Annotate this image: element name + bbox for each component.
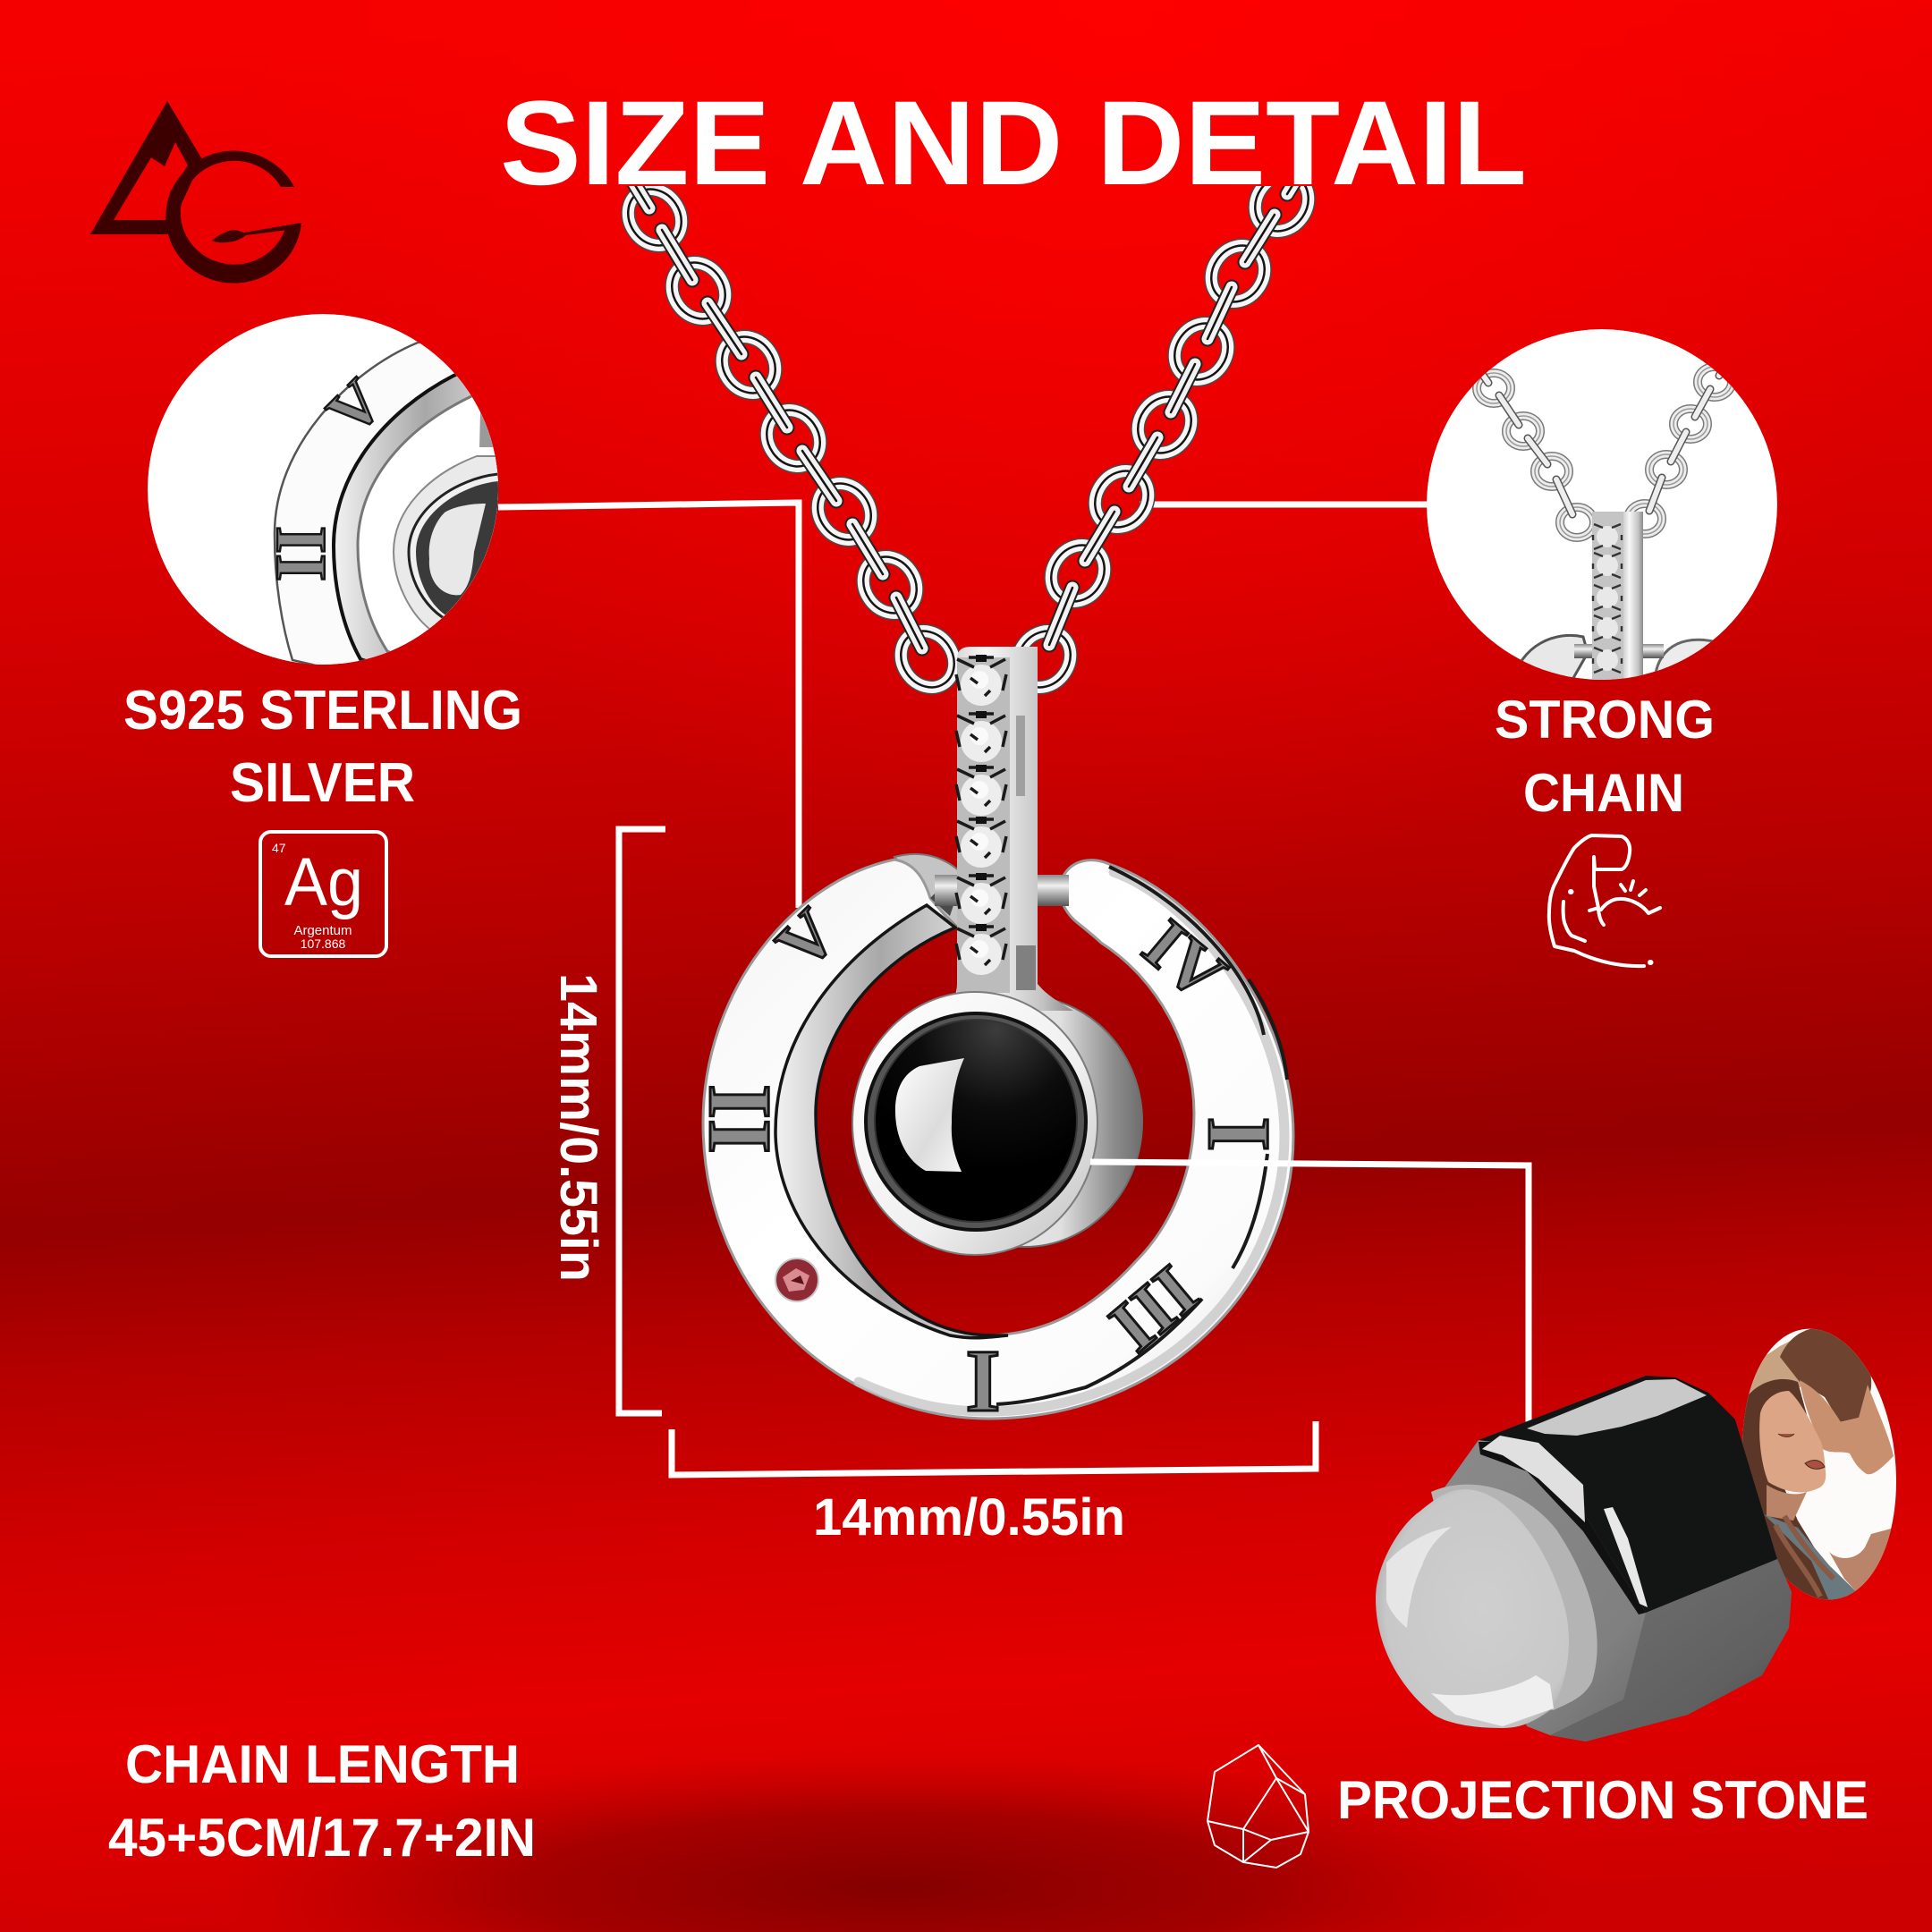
title: SIZE AND DETAIL [500, 77, 1527, 210]
woman face [1759, 1391, 1826, 1492]
icon: silver periodic element: 107.868 [301, 936, 346, 951]
woman hair [1740, 1379, 1847, 1601]
stone highlight [895, 1058, 964, 1172]
stone highlights [1527, 1379, 1707, 1436]
pendant ring band [703, 860, 1293, 1419]
icon: silver periodic element: Argentum [293, 923, 352, 938]
stone lower body [1550, 1559, 1792, 1741]
label: strong chain [1495, 690, 1715, 823]
roman numeral IV: IV [1129, 905, 1240, 1016]
pendant [691, 647, 1293, 1430]
woman neck [1767, 1485, 1807, 1521]
stone black body [1479, 1376, 1777, 1613]
light collar [1431, 1485, 1597, 1710]
dimension bracket horizontal [672, 1421, 1316, 1475]
black projection stone [875, 1020, 1077, 1222]
label: strong chain: STRONG [1495, 690, 1715, 750]
roman numeral II: II [691, 1084, 790, 1154]
pendant inner rim [775, 905, 1008, 1338]
dimension bracket vertical [619, 829, 665, 1413]
ring tip shadow [930, 884, 957, 916]
dimension label vertical: 14mm/0.55in [549, 973, 607, 1282]
label: chain length: 45+5CM/17.7+2IN [108, 1808, 536, 1868]
couple photo projection [1742, 1329, 1896, 1599]
hat [1746, 1341, 1801, 1403]
ring back section [894, 854, 961, 930]
icon: silver periodic element: Ag [284, 844, 363, 920]
logo: mountain and G mark [90, 101, 301, 284]
connector line: sterling silver callout [498, 503, 799, 908]
roman numeral V: V [761, 894, 852, 984]
stone glass lens [1376, 1489, 1569, 1728]
label: chain length [108, 1734, 536, 1868]
projection stone bezel [852, 992, 1097, 1255]
red gem [775, 1258, 818, 1301]
roman numeral III: III [1095, 1250, 1213, 1367]
hair strands [1775, 1516, 1834, 1597]
label: sterling silver: S925 STERLING [123, 680, 522, 741]
icon: silver periodic element: 47 [272, 841, 286, 855]
label: sterling silver: SILVER [230, 752, 415, 814]
roman numeral I right: I [1190, 1117, 1289, 1151]
icon: gem outline [1208, 1745, 1309, 1868]
connector line: projection stone callout [1090, 1162, 1529, 1431]
woman lips and eye [1778, 1434, 1825, 1469]
stone black band [1479, 1442, 1646, 1614]
detail circle: sterling silver: V [313, 365, 397, 449]
label: strong chain: CHAIN [1523, 763, 1684, 823]
label: chain length: CHAIN LENGTH [125, 1734, 520, 1794]
connector line: strong chain callout [1140, 501, 1429, 508]
arm [1829, 1529, 1891, 1590]
necklace chain [617, 157, 1319, 698]
lens reflection bottom [1431, 1675, 1554, 1726]
detail circle: sterling silver: II [261, 526, 340, 581]
ring edge lines [996, 867, 1287, 1404]
label: sterling silver [123, 680, 522, 814]
icon: flexed muscle [1549, 835, 1660, 966]
dimension label horizontal: 14mm/0.55in [813, 1488, 1125, 1546]
stone silhouette base [1445, 1376, 1792, 1741]
pin [935, 875, 1069, 906]
lens reflection top [1386, 1527, 1452, 1628]
man hair [1780, 1326, 1871, 1422]
icon: silver periodic element [260, 832, 386, 956]
detail circle: strong chain [1427, 329, 1777, 684]
label: projection stone: PROJECTION STONE [1337, 1770, 1868, 1830]
stone housing side [908, 996, 1142, 1247]
projection stone illustration [1376, 1324, 1905, 1741]
detail circle: sterling silver [148, 314, 498, 665]
bail [948, 647, 1073, 1011]
roman numeral I bottom: I [966, 1331, 1000, 1430]
shirt [1764, 1514, 1859, 1601]
man face [1800, 1380, 1894, 1474]
ring outer edge shading [859, 872, 1284, 1411]
